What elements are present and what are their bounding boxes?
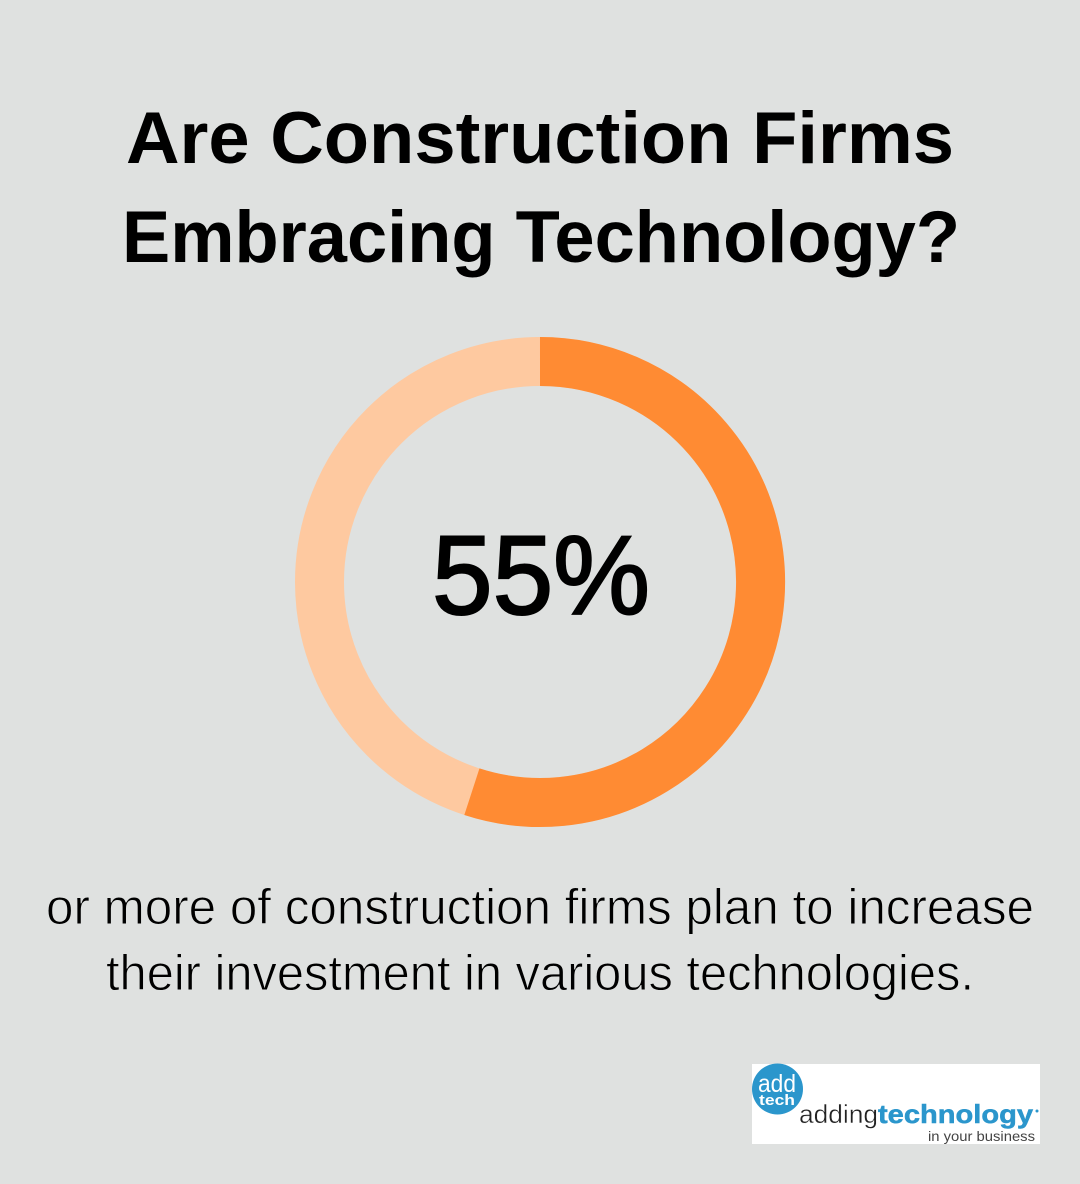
logo wordmark: technology [878, 1099, 1034, 1129]
donut track [320, 362, 760, 802]
logo wordmark: adding [799, 1099, 878, 1129]
donut value arc [472, 362, 761, 802]
donut chart: 55% [320, 362, 761, 802]
logo: adding technology [752, 1064, 1040, 1144]
title: Embracing Technology? [122, 197, 960, 278]
description text [46, 879, 1034, 1001]
title [122, 98, 960, 278]
logo wordmark [799, 1099, 1038, 1129]
description text: or more of construction firms plan to increase [46, 879, 1034, 935]
logo tagline: in your business [928, 1129, 1035, 1144]
percentage value: 55% [432, 513, 650, 638]
logo badge [752, 1064, 803, 1114]
logo badge: add [758, 1070, 796, 1098]
logo badge: tech [759, 1092, 795, 1109]
title: Are Construction Firms [126, 98, 954, 179]
description text: their investment in various technologies. [106, 945, 974, 1001]
